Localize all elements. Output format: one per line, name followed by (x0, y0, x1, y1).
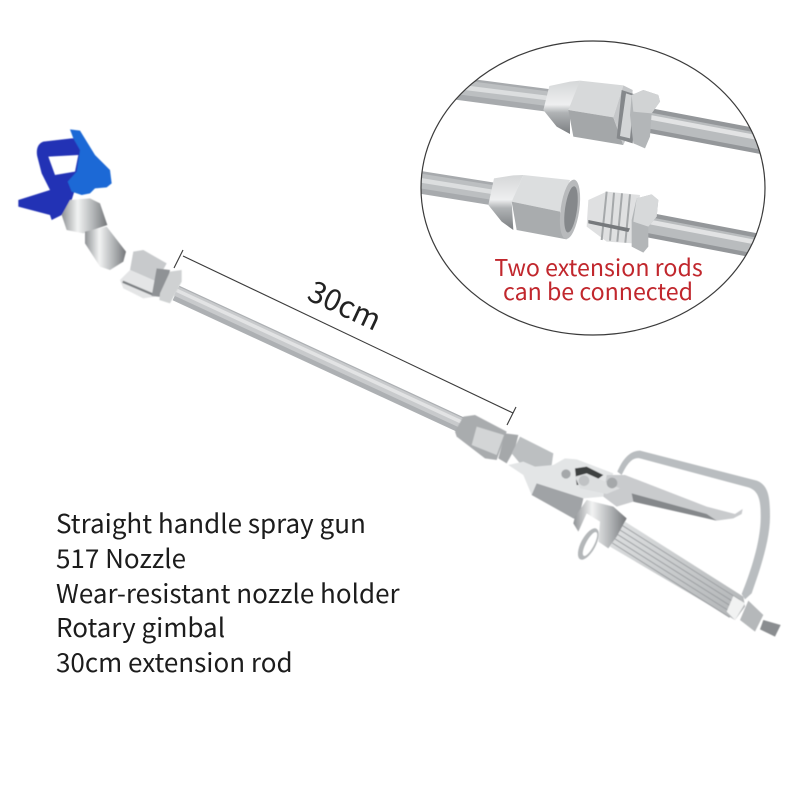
grip (610, 522, 745, 620)
gun head shadow (532, 483, 583, 520)
gun head (508, 458, 613, 520)
feature list: Wear-resistant nozzle holder (56, 574, 401, 611)
bottom fitting (740, 601, 763, 632)
rod hex end (159, 270, 182, 303)
guard ring (617, 451, 770, 599)
inset oval outline (421, 41, 765, 335)
gimbal swivel (85, 227, 126, 270)
nozzle and gimbal (18, 129, 182, 303)
flange ring (574, 525, 603, 563)
trigger (603, 475, 743, 521)
feature list (56, 504, 401, 680)
gun body (455, 415, 781, 637)
rod connector nut (455, 415, 507, 460)
gun barrel (512, 437, 553, 470)
threaded outlet (760, 620, 781, 637)
upper left rod (443, 85, 550, 101)
inset rods and connectors (410, 81, 770, 253)
extension rod (176, 290, 470, 429)
lower socket connector (488, 175, 583, 240)
icon: dark blue nozzle holder (18, 138, 83, 220)
lower right rod (648, 222, 770, 248)
feature list: Rotary gimbal (56, 608, 225, 645)
hex fitting (498, 433, 518, 463)
lower left rod (410, 179, 493, 194)
dimension line: 30cm (174, 250, 516, 425)
inset caption: Two extension rods (494, 249, 703, 283)
grip head (573, 500, 627, 548)
infographic canvas (18, 40, 781, 672)
icon: light blue nozzle guard (68, 129, 112, 195)
grip end cap (727, 596, 745, 620)
feature list: 30cm extension rod (56, 643, 293, 680)
pivot hardware (561, 467, 620, 494)
gimbal lower nut (120, 250, 167, 298)
lower threaded male connector (587, 192, 658, 253)
inset caption: can be connected (503, 273, 693, 307)
upper connector (543, 81, 660, 148)
inset caption (494, 249, 703, 307)
gimbal upper nut (62, 198, 107, 233)
dimension label: 30cm (302, 267, 390, 339)
upper right rod (650, 117, 770, 143)
trigger shadow (632, 493, 717, 521)
feature list: 517 Nozzle (56, 539, 186, 576)
feature list: Straight handle spray gun (56, 504, 366, 541)
spray gun assembly (18, 129, 781, 637)
inset: two extension rods connected (410, 41, 770, 335)
gimbal collar (152, 268, 170, 297)
